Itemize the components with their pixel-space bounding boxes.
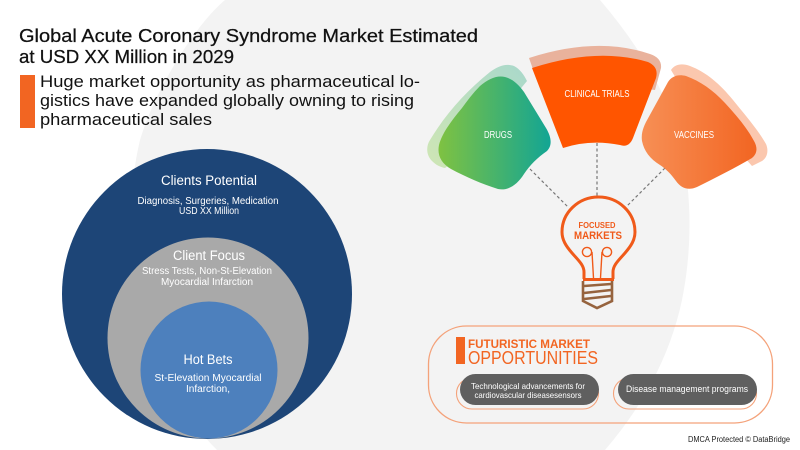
petal: clinical trials bbox=[529, 46, 661, 148]
filament bbox=[582, 247, 612, 278]
dashed connectors bbox=[530, 143, 665, 207]
petal: vaccines bbox=[642, 64, 767, 189]
title: Global Acute Coronary Syndrome Market Estimated bbox=[19, 25, 478, 46]
hot bets text: St-Elevation Myocardial bbox=[154, 373, 262, 384]
pill: disease management: Disease management programs bbox=[626, 384, 748, 394]
subtitle text: gistics have expanded globally owning to rising bbox=[40, 91, 414, 110]
subtitle text: pharmaceutical sales bbox=[40, 110, 212, 129]
client focus text: Myocardial Infarction bbox=[161, 277, 253, 288]
heading accent bar bbox=[456, 337, 465, 364]
panel: futuristic market opportunities bbox=[428, 326, 772, 423]
hot bets text bbox=[154, 352, 262, 395]
subtitle text bbox=[40, 72, 420, 129]
client focus text: Stress Tests, Non-St-Elevation bbox=[142, 266, 272, 277]
bulb glass bbox=[562, 197, 635, 279]
icon: light bulb bbox=[562, 197, 635, 308]
heading bbox=[468, 339, 598, 368]
pill: disease management bbox=[614, 374, 757, 409]
focused markets label: MARKETS bbox=[574, 230, 622, 242]
client focus text bbox=[142, 248, 272, 288]
background blob bbox=[132, 0, 690, 450]
heading: FUTURISTIC MARKET bbox=[468, 339, 590, 351]
clients potential text: Diagnosis, Surgeries, Medication bbox=[138, 196, 278, 207]
label: vaccines: VACCINES bbox=[674, 130, 714, 141]
circle: clients potential bbox=[62, 149, 352, 439]
pill: technological advancements bbox=[456, 374, 599, 409]
title: at USD XX Million in 2029 bbox=[19, 46, 234, 67]
title bbox=[19, 25, 478, 67]
clients potential text: Clients Potential bbox=[161, 173, 257, 188]
subtitle text: Huge market opportunity as pharmaceutical lo- bbox=[40, 72, 420, 91]
circle: client focus bbox=[108, 238, 308, 438]
clients potential text bbox=[138, 173, 278, 217]
subtitle accent bar bbox=[20, 75, 35, 128]
neck bar bbox=[583, 278, 614, 281]
client focus text: Client Focus bbox=[173, 248, 245, 263]
circle: hot bets bbox=[140, 302, 278, 438]
label: clinical trials: CLINICAL TRIALS bbox=[564, 89, 630, 100]
screw base bbox=[583, 281, 612, 308]
label: drugs: DRUGS bbox=[484, 130, 512, 141]
clients potential text: USD XX Million bbox=[179, 206, 239, 217]
focused markets label: FOCUSED bbox=[578, 221, 616, 230]
nested circle chart bbox=[62, 149, 352, 439]
footer credit: DMCA Protected © DataBridge bbox=[688, 435, 791, 444]
hot bets text: Infarction, bbox=[186, 384, 230, 395]
heading: OPPORTUNITIES bbox=[468, 348, 598, 368]
pill: technological advancements: Technological advancements for bbox=[471, 381, 585, 391]
petal: drugs bbox=[427, 65, 551, 189]
hot bets text: Hot Bets bbox=[184, 352, 233, 367]
focused markets label bbox=[574, 221, 622, 242]
pill: technological advancements: cardiovascular diseasesensors bbox=[474, 390, 582, 400]
